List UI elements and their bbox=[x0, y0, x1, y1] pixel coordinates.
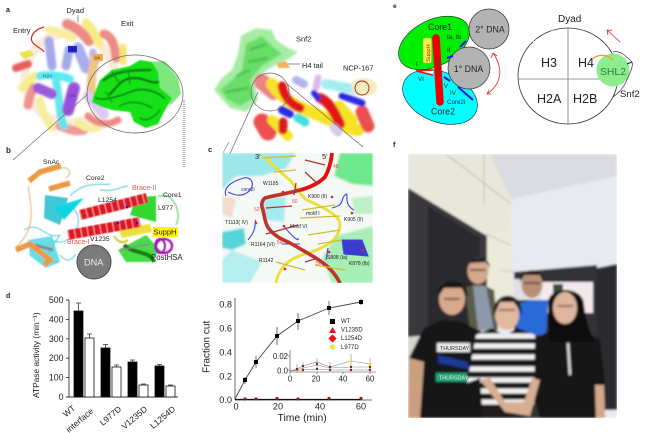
y ticks bbox=[49, 295, 64, 402]
legend: WT bbox=[341, 319, 351, 325]
labels b bbox=[43, 159, 183, 262]
SuppH highlight: SuppH bbox=[154, 228, 176, 236]
SHL2 Snf2 bbox=[592, 52, 640, 100]
y ticks: 500 bbox=[49, 295, 64, 305]
protein background c bbox=[222, 153, 373, 283]
motif labels: IV bbox=[450, 90, 457, 97]
x labels: V1235D bbox=[119, 404, 149, 431]
panel a: nucleosome with Snf2, top view: Exit bbox=[121, 19, 134, 28]
Core2 ellipse bbox=[394, 59, 486, 135]
labels b: V1235 bbox=[90, 236, 110, 243]
nucleosome disc bbox=[518, 14, 618, 124]
panel label b: b bbox=[6, 146, 11, 155]
panel label e: e bbox=[393, 3, 397, 10]
core labels: Core1 bbox=[428, 22, 452, 32]
strand ends c: 3' bbox=[255, 152, 261, 161]
entry yellow tail bbox=[19, 50, 34, 59]
panel b: ribbon structure bbox=[6, 146, 183, 279]
labels b: SnAc bbox=[43, 159, 60, 166]
histone labels: H3 bbox=[70, 47, 76, 52]
histone labels: H2A bbox=[43, 74, 53, 80]
nucleosome disc: Dyad bbox=[558, 14, 581, 25]
DNA circle: DNA bbox=[84, 258, 104, 268]
panel e: schematic: Core2 bbox=[431, 106, 455, 116]
1 degree DNA circle: 1° DNA bbox=[454, 64, 483, 74]
red brace helices bbox=[80, 198, 147, 215]
labels b: Brace-II bbox=[132, 185, 157, 192]
labels c bbox=[225, 164, 370, 267]
panel a: nucleosome with Snf2, top view: Entry bbox=[13, 26, 31, 35]
magenta PostHSA bbox=[156, 239, 172, 253]
nucleosome disc: H4 bbox=[578, 56, 594, 70]
labels c: 54 bbox=[277, 240, 283, 246]
labels c: R1164 (VI) bbox=[251, 242, 275, 248]
x labels: L977D bbox=[98, 404, 123, 428]
inset chart: 0.02 bbox=[273, 352, 288, 361]
labels c: 52 bbox=[254, 207, 260, 213]
dark cabinet bbox=[408, 188, 487, 337]
callout ellipse and connecting lines bbox=[13, 15, 184, 168]
labels c: 50 bbox=[292, 199, 298, 205]
y ticks: 0.4 bbox=[219, 348, 232, 358]
x ticks: 40 bbox=[315, 402, 325, 412]
x ticks: 0 bbox=[233, 402, 239, 412]
DNA circle bbox=[77, 245, 111, 279]
SuppH label box bbox=[423, 38, 432, 63]
WT curve bbox=[235, 299, 363, 399]
panel label f: f bbox=[393, 142, 396, 149]
panel label a: a bbox=[6, 7, 10, 14]
panel c: DNA binding detail: 5' bbox=[322, 152, 328, 161]
SHL2 Snf2: Snf2 bbox=[620, 89, 640, 100]
Core1 ellipse bbox=[390, 5, 478, 81]
panel f: team photograph bbox=[393, 142, 617, 418]
labels c: K878 (Ib) bbox=[349, 261, 370, 267]
panel a right: side view with NCP-167: H4 tail bbox=[302, 61, 323, 70]
labels c: R1142 bbox=[259, 258, 274, 264]
panel d: ATPase bar chart bbox=[6, 293, 178, 433]
y ticks bbox=[219, 300, 232, 405]
labels c: K905 (II) bbox=[344, 217, 364, 223]
callout circle and lines side view bbox=[228, 64, 363, 158]
green core1 ribbon bbox=[158, 196, 178, 225]
y axis and title: ATPase activity (min⁻¹) bbox=[31, 312, 41, 398]
x labels: WT bbox=[61, 403, 77, 419]
y ticks: 0.6 bbox=[219, 324, 232, 334]
inset chart: 40 bbox=[339, 374, 348, 384]
labels b: L1254 bbox=[98, 197, 117, 204]
y ticks: 0.8 bbox=[219, 300, 232, 310]
right machine bbox=[514, 265, 597, 418]
SHL2 Snf2: SHL2 bbox=[600, 67, 626, 78]
front center person bbox=[482, 405, 528, 418]
y ticks: 0.2 bbox=[219, 372, 232, 382]
y ticks: 0 bbox=[59, 392, 64, 402]
labels side view: Snf2 bbox=[296, 34, 311, 44]
panel c: DNA binding detail bbox=[208, 142, 373, 283]
panel label d: d bbox=[6, 293, 10, 300]
x title: Time (min) bbox=[278, 413, 327, 424]
2 degree DNA circle bbox=[469, 9, 509, 49]
y title: Fraction cut bbox=[202, 321, 212, 373]
red arrow between DNAs bbox=[487, 53, 500, 94]
motif labels bbox=[416, 34, 465, 106]
x ticks: 20 bbox=[273, 402, 283, 412]
nucleosome disc: H2B bbox=[573, 92, 597, 106]
labels c: motif I bbox=[306, 211, 320, 217]
small DNA ring NCP-167 bbox=[351, 78, 377, 96]
cyan core2 ribbon bbox=[24, 184, 128, 262]
error bars bbox=[76, 303, 173, 386]
labels b: Core2 bbox=[86, 175, 105, 182]
panel d right: fraction cut line chart bbox=[202, 298, 376, 424]
labels c: T1113( IV) bbox=[225, 220, 248, 226]
panel e: schematic bbox=[390, 3, 640, 135]
Snf2 density side view bbox=[214, 28, 298, 112]
panel a right: side view with NCP-167: NCP-167 bbox=[343, 64, 373, 72]
motif labels: II bbox=[447, 47, 451, 54]
SuppH label box: SuppH bbox=[426, 44, 432, 62]
inset chart: 60 bbox=[366, 374, 375, 384]
labels c: Motif VI bbox=[290, 224, 307, 230]
histone labels: H4 bbox=[94, 56, 101, 60]
motif labels: I bbox=[416, 61, 418, 68]
nucleosome disc: H2A bbox=[537, 92, 562, 106]
residue dots bbox=[117, 206, 138, 224]
labels c: 56 bbox=[316, 261, 322, 267]
x labels: L1254D bbox=[148, 404, 177, 431]
x ticks bbox=[233, 402, 366, 412]
labels c: K900 (II) bbox=[308, 194, 328, 200]
axes bbox=[235, 298, 372, 400]
red brace bbox=[416, 38, 442, 102]
labels c: S808 (Ia) bbox=[327, 255, 348, 261]
legend: V1235D bbox=[341, 328, 363, 334]
inset chart: 0.0 bbox=[277, 366, 289, 376]
inset chart: 0 bbox=[288, 374, 293, 384]
axes bbox=[66, 300, 178, 397]
legend: L977D bbox=[341, 345, 359, 351]
labels b: Core1 bbox=[163, 192, 182, 199]
back left man bbox=[465, 283, 498, 330]
motif labels: V bbox=[444, 83, 449, 90]
histone labels: H2B bbox=[68, 93, 76, 98]
x ticks: 60 bbox=[356, 402, 366, 412]
blue contact strips bbox=[444, 41, 473, 100]
residue dots c bbox=[255, 191, 364, 270]
labels c: W1185 bbox=[263, 181, 279, 187]
labels c: core2i bbox=[241, 187, 255, 193]
orange SnAc bbox=[16, 166, 70, 265]
y ticks: 300 bbox=[49, 334, 64, 344]
1 degree DNA circle bbox=[448, 47, 490, 89]
panel label c: c bbox=[208, 145, 212, 154]
shirt text bbox=[439, 346, 470, 382]
connector line c bbox=[223, 142, 229, 153]
front left person bbox=[409, 320, 484, 418]
y ticks: 100 bbox=[49, 373, 64, 383]
back right man bbox=[516, 300, 548, 335]
panel a right: side view with NCP-167 bbox=[214, 28, 377, 158]
H4 tail orange bbox=[277, 61, 290, 68]
red direction arrow bbox=[607, 30, 620, 42]
Snf2 green density bbox=[92, 60, 181, 128]
nucleosome side view bands bbox=[262, 78, 368, 136]
blue loops c bbox=[225, 178, 368, 260]
inset chart: 20 bbox=[312, 374, 321, 384]
motif labels: VI bbox=[418, 76, 424, 83]
shirt text: THURSDAY bbox=[439, 376, 469, 382]
shirt text: THURSDAY bbox=[440, 346, 470, 352]
DNA backbones c bbox=[262, 153, 345, 283]
mutant curves at baseline bbox=[235, 397, 363, 401]
room background bbox=[412, 176, 617, 418]
red brace: Brace bbox=[436, 59, 442, 74]
y ticks: 200 bbox=[49, 353, 64, 363]
bars bbox=[74, 311, 175, 397]
legend: L1254D bbox=[341, 336, 363, 342]
nucleosome DNA and histones bbox=[16, 23, 123, 131]
y ticks: 0.0 bbox=[219, 395, 232, 405]
labels c: 48 bbox=[333, 164, 339, 170]
motif labels: Core2i bbox=[447, 99, 465, 106]
yellow SuppH bbox=[118, 224, 152, 238]
labels a: Dyad bbox=[66, 6, 84, 15]
histone labels bbox=[43, 46, 103, 98]
labels b: Brace-I bbox=[67, 239, 90, 246]
x labels bbox=[61, 403, 177, 433]
inset chart bbox=[273, 350, 376, 384]
panel a: nucleosome with Snf2, top view bbox=[6, 6, 184, 168]
labels b: PostHSA bbox=[151, 253, 183, 262]
DNA entry strand bbox=[31, 27, 44, 52]
nucleosome disc: H3 bbox=[541, 56, 557, 70]
motif labels: Ia, Ib bbox=[447, 34, 461, 41]
y ticks: 400 bbox=[49, 314, 64, 324]
front right person bbox=[530, 330, 605, 418]
2 degree DNA circle: 2° DNA bbox=[475, 24, 505, 34]
labels b: L977 bbox=[158, 205, 173, 212]
legend bbox=[329, 319, 363, 351]
